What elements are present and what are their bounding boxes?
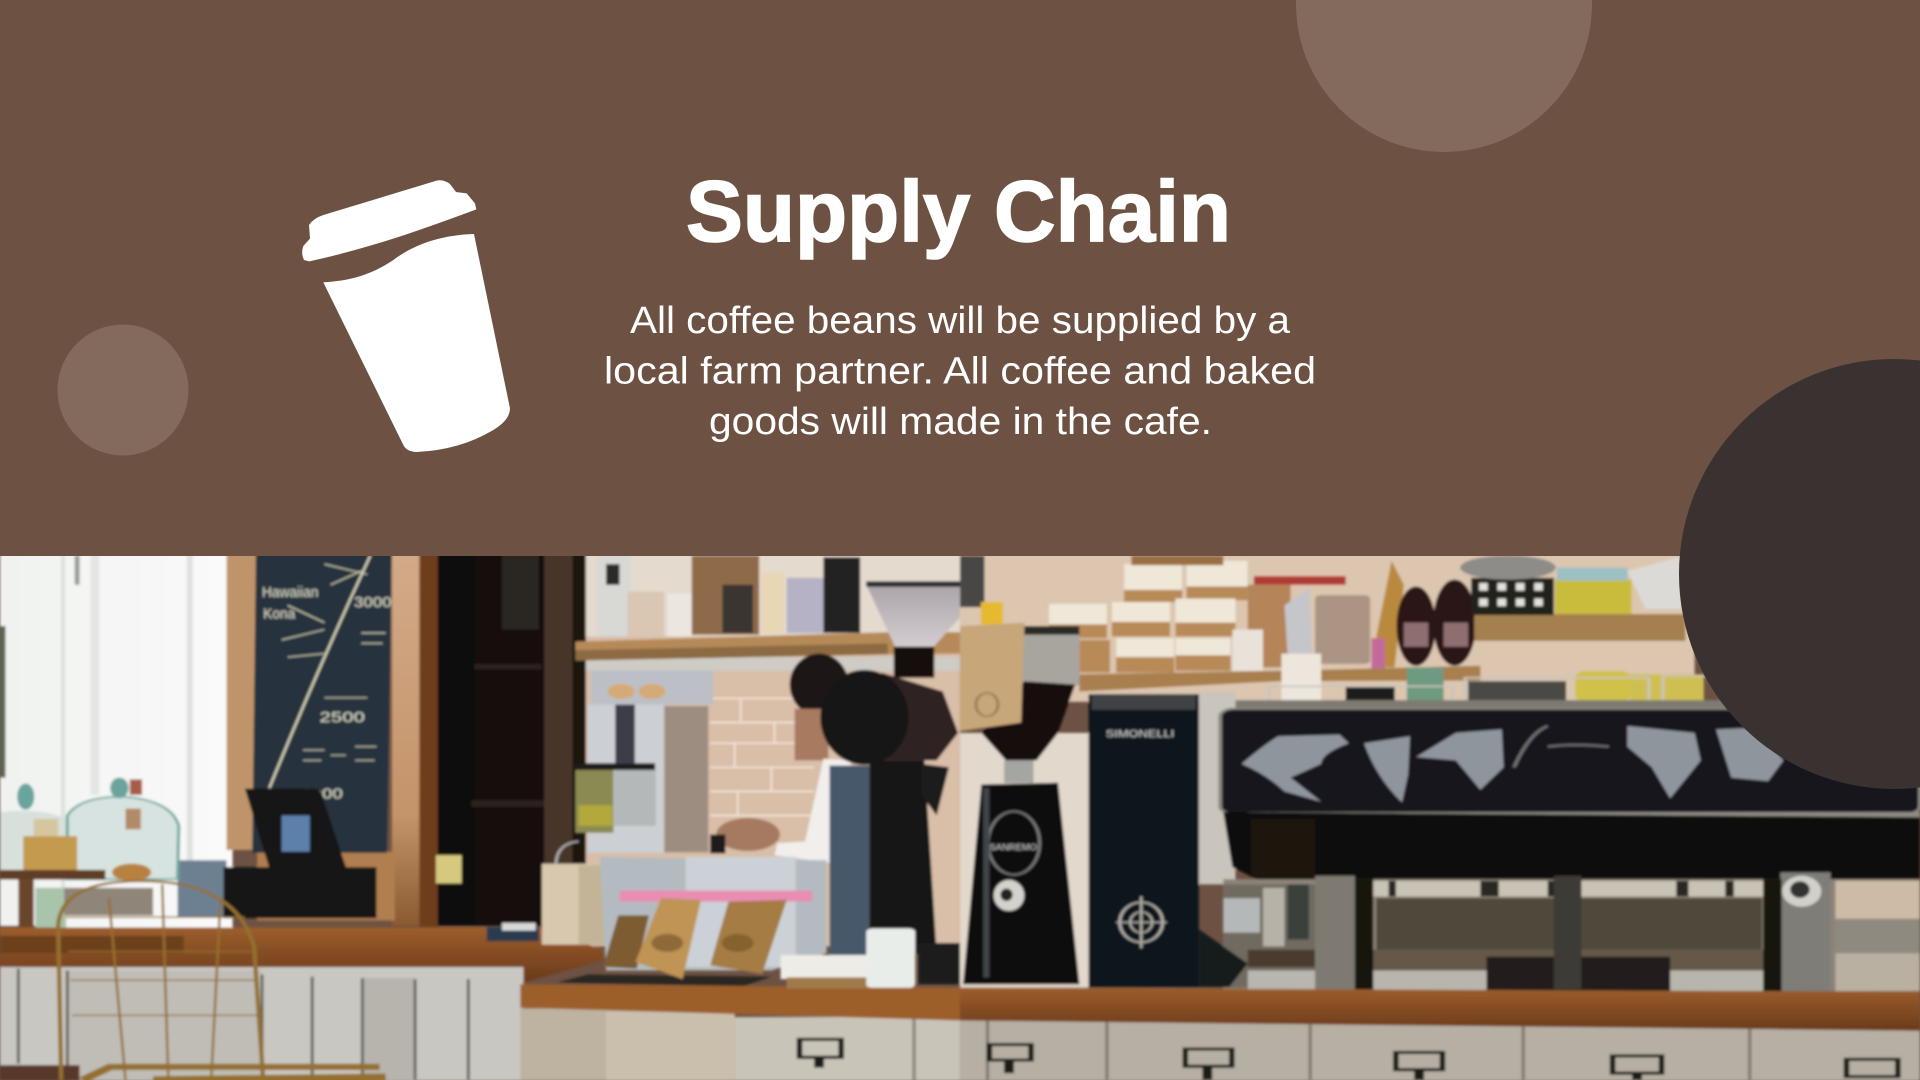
cake domes (0, 810, 66, 872)
body text: All coffee beans will be supplied by a (630, 300, 1291, 342)
shelf items (597, 555, 631, 636)
body text: goods will made in the cafe. (709, 401, 1212, 443)
icon: takeaway coffee cup (302, 180, 510, 452)
machine (1235, 700, 1920, 710)
planks (0, 967, 523, 1080)
drawers (960, 1020, 1920, 1080)
decorative circle: top (1296, 0, 1592, 152)
drawer handle (800, 1039, 841, 1057)
body text: local farm partner. All coffee and baked (604, 350, 1316, 392)
photo left half: Hawaiian (262, 584, 318, 600)
shelves (1079, 666, 1480, 692)
napkin box (781, 955, 869, 979)
paper bags (1049, 561, 1248, 673)
water dispenser (591, 670, 713, 705)
paper cup (866, 928, 915, 988)
chair (58, 881, 386, 1080)
photo left half: 3000 (354, 595, 392, 611)
barista (790, 654, 849, 716)
post-it (436, 855, 462, 883)
photo left half: Kona (263, 606, 295, 622)
title: Supply Chain (686, 164, 1231, 260)
photo left half: 2500 (320, 709, 365, 725)
POS terminal (245, 789, 348, 872)
photo right half: SIMONELLI (1106, 729, 1174, 740)
grinder two (1089, 694, 1199, 987)
photo: cafe counter (0, 554, 1920, 1080)
grinder one (866, 583, 960, 647)
counter lower (520, 984, 960, 1020)
counter (960, 988, 1920, 1031)
counter upper (0, 927, 603, 982)
under machine (1223, 879, 1920, 991)
photo right half (960, 554, 1920, 1080)
banner background (0, 0, 1920, 556)
photo left half: 1000 (301, 786, 343, 802)
kraft tag (960, 623, 1024, 731)
decorative circle: right dark (1679, 359, 1920, 789)
photo left half (0, 554, 960, 1080)
grinder three (1021, 627, 1079, 685)
photo right half: SANREMO (989, 842, 1037, 852)
decorative circle: left (58, 324, 188, 456)
body text (604, 300, 1316, 443)
takeaway bags (542, 864, 591, 945)
